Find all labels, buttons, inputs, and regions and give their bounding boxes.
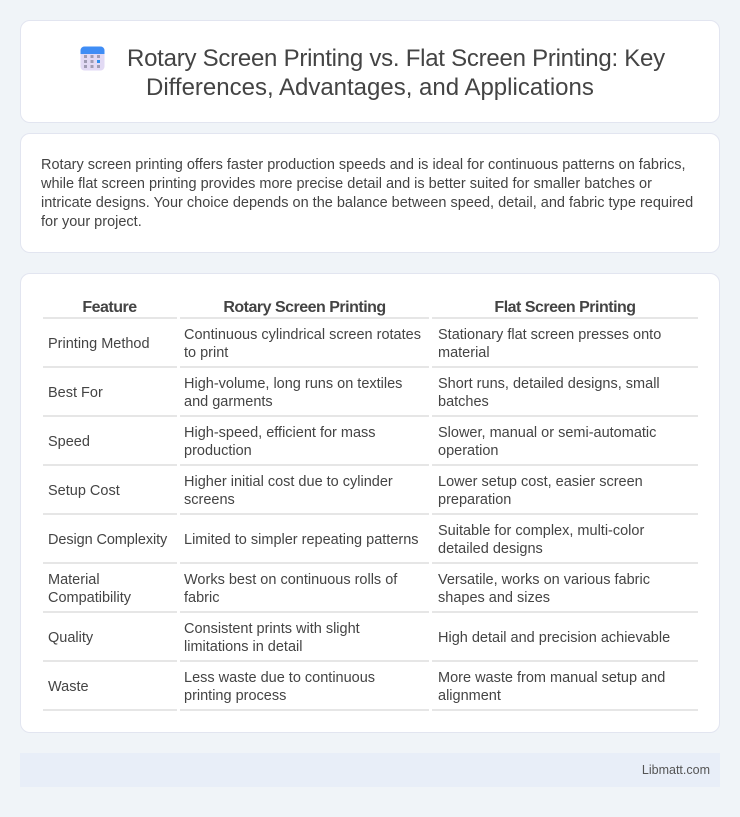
text: Suitable for complex, multi-color: [438, 523, 644, 539]
row: Quality: [48, 621, 670, 655]
header panel: [20, 20, 720, 123]
text: Stationary flat screen presses onto: [438, 327, 661, 343]
row: Material Compatibility: [48, 572, 650, 606]
table heading: Flat Screen Printing: Flat Screen Printing: [494, 299, 636, 316]
text: Short runs, detailed designs, small: [438, 376, 660, 392]
summary text: Rotary screen printing offers faster production speeds and is ideal for continuous patterns on fabrics,: [41, 157, 686, 173]
text: printing process: [184, 688, 286, 704]
text: High-volume, long runs on textiles: [184, 376, 402, 392]
text: Material: [48, 572, 100, 588]
text: Consistent prints with slight: [184, 621, 360, 637]
summary text: [41, 157, 693, 230]
summary text: intricate designs. Your choice depends on the balance between speed, detail, and fabric type required: [41, 195, 693, 211]
row: Best For: [48, 376, 660, 410]
text: alignment: [438, 688, 501, 704]
footer text: Libmatt.com: Libmatt.com: [642, 763, 710, 777]
text: Versatile, works on various fabric: [438, 572, 650, 588]
text: Waste: [48, 679, 89, 695]
text: Less waste due to continuous: [184, 670, 375, 686]
text: Higher initial cost due to cylinder: [184, 474, 393, 490]
table panel: [20, 273, 720, 733]
summary text: while flat screen printing provides more precise detail and is better suited for smaller batches or: [41, 176, 652, 192]
table heading: Rotary Screen Printing: Rotary Screen Printing: [223, 299, 386, 316]
text: Setup Cost: [48, 483, 120, 499]
text: Works best on continuous rolls of: [184, 572, 397, 588]
text: to print: [184, 345, 228, 361]
table heading: Feature: Feature: [82, 299, 137, 316]
text: Lower setup cost, easier screen: [438, 474, 643, 490]
text: material: [438, 345, 490, 361]
text: Design Complexity: [48, 532, 167, 548]
text: limitations in detail: [184, 639, 302, 655]
text: preparation: [438, 492, 511, 508]
row: Waste: [48, 670, 665, 704]
text: Best For: [48, 385, 103, 401]
text: production: [184, 443, 252, 459]
text: Slower, manual or semi-automatic: [438, 425, 656, 441]
text: Limited to simpler repeating patterns: [184, 532, 419, 548]
text: shapes and sizes: [438, 590, 550, 606]
text: Continuous cylindrical screen rotates: [184, 327, 421, 343]
text: Speed: [48, 434, 90, 450]
row: Printing Method: [48, 327, 661, 361]
text: Quality: [48, 630, 93, 646]
text: Printing Method: [48, 336, 150, 352]
text: High detail and precision achievable: [438, 630, 670, 646]
text: screens: [184, 492, 235, 508]
summary text: for your project.: [41, 214, 142, 230]
text: and garments: [184, 394, 273, 410]
text: batches: [438, 394, 489, 410]
text: detailed designs: [438, 541, 543, 557]
row: Setup Cost: [48, 474, 643, 508]
footer bar: [20, 753, 720, 787]
text: High-speed, efficient for mass: [184, 425, 376, 441]
title: [127, 45, 665, 101]
text: operation: [438, 443, 498, 459]
title: Differences, Advantages, and Applications: [146, 74, 594, 101]
text: Compatibility: [48, 590, 131, 606]
row: Speed: [48, 425, 656, 459]
text: More waste from manual setup and: [438, 670, 665, 686]
row: Design Complexity: [48, 523, 644, 557]
title: Rotary Screen Printing vs. Flat Screen Printing: Key: [127, 45, 665, 72]
text: fabric: [184, 590, 219, 606]
icon: calendar grid: [80, 46, 104, 70]
summary panel: [20, 133, 720, 253]
